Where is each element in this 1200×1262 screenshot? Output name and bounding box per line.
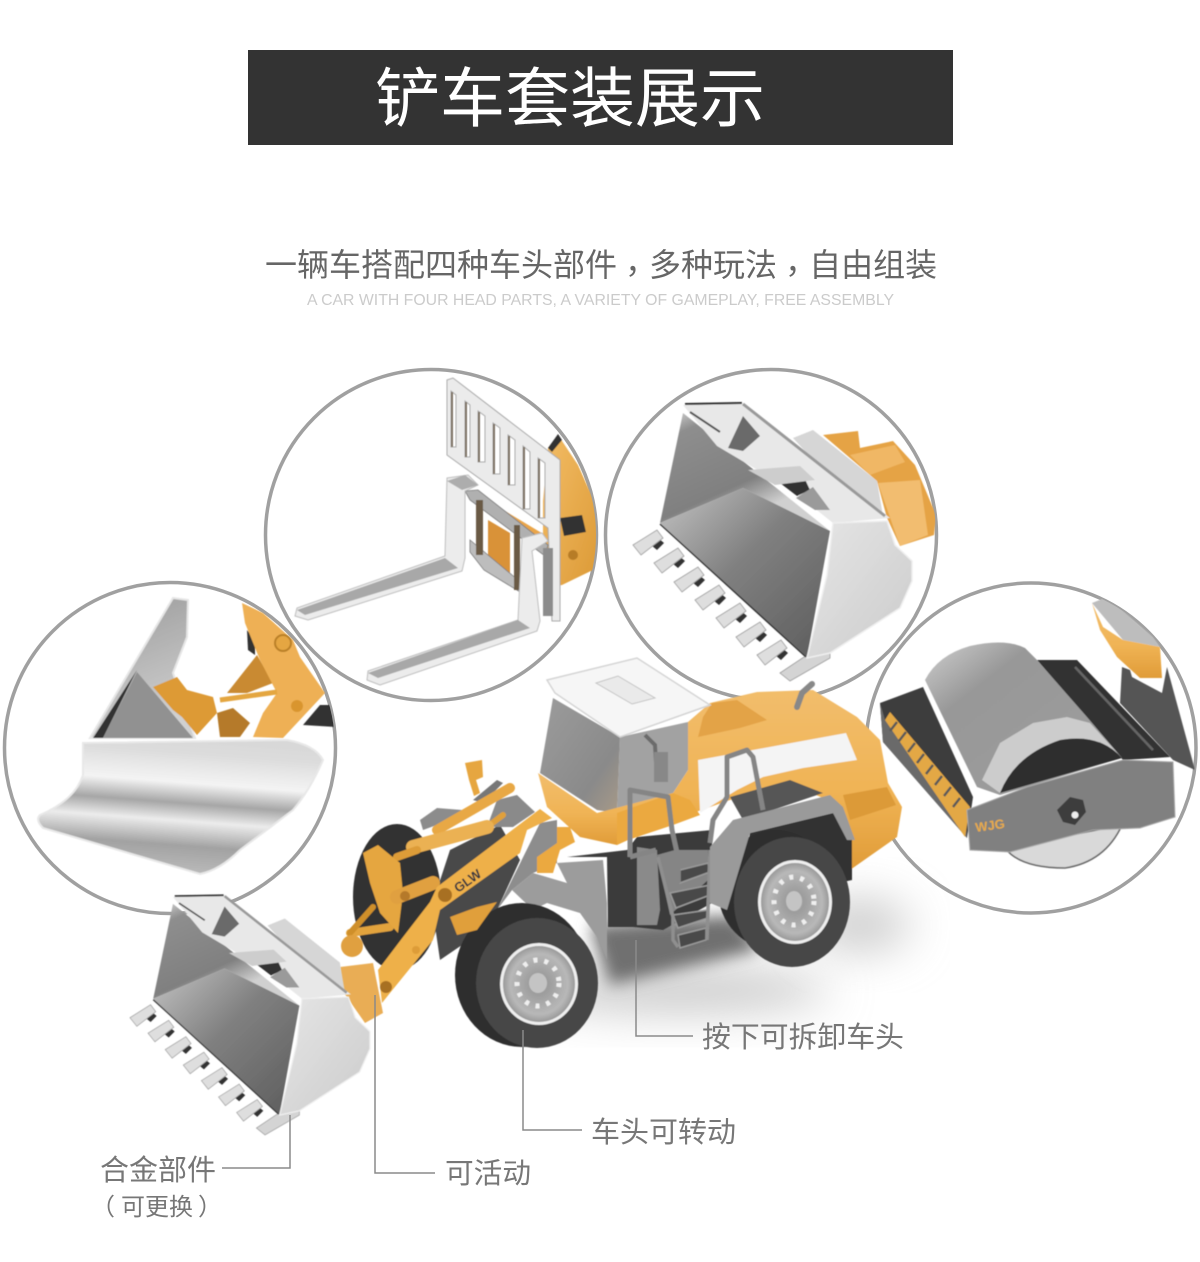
lower orange side	[617, 793, 700, 845]
subtitle chinese: 一辆车搭配四种车头部件	[265, 247, 617, 283]
plate bolt	[1057, 797, 1086, 825]
rear tire	[718, 830, 850, 967]
rear left tire	[353, 824, 441, 970]
label: alloy part: 合金部件	[100, 1154, 216, 1187]
leader lines	[222, 940, 693, 1173]
plate brand: WJG	[974, 816, 1006, 835]
panel: forklift attachment circle	[266, 370, 597, 700]
rocker	[363, 845, 403, 933]
subtitle english: A CAR WITH FOUR HEAD PARTS, A VARIETY OF GAMEPLAY, FREE ASSEMBLY	[307, 292, 894, 309]
fork left	[295, 475, 478, 620]
truck illustration	[340, 658, 902, 1048]
wheel well	[738, 813, 852, 905]
orange arm behind forklift	[543, 435, 597, 588]
title bar	[248, 50, 953, 145]
rear bumper shade	[843, 787, 896, 820]
cab orange band	[538, 773, 673, 845]
blade	[38, 740, 323, 874]
arm details	[400, 888, 497, 954]
cylinders	[350, 788, 510, 933]
hood vents	[698, 700, 767, 737]
side fin	[90, 598, 195, 738]
chassis	[567, 830, 712, 930]
label: head rotates: 车头可转动	[591, 1116, 736, 1149]
cab roof	[547, 658, 710, 737]
orange linkage	[227, 655, 273, 693]
front plate	[967, 760, 1175, 852]
main bucket	[130, 895, 370, 1135]
title text: 铲车套装展示	[375, 62, 765, 135]
rear fender	[710, 795, 855, 910]
subtitle chinese: 多种玩法	[649, 247, 777, 283]
rear left fender	[420, 808, 462, 830]
subtitle chinese: 自由组装	[809, 247, 937, 283]
body white panel	[698, 733, 857, 813]
label: replaceable: （可更换）	[91, 1194, 222, 1221]
exhaust	[797, 684, 812, 707]
stairs	[658, 850, 710, 948]
right rail and mount	[1120, 667, 1195, 770]
gray strut	[497, 820, 557, 910]
mirror	[645, 735, 668, 782]
step deck	[730, 780, 823, 820]
middle panel	[637, 847, 660, 925]
subtitle chinese: ，	[785, 244, 817, 280]
body	[673, 690, 902, 870]
roller body	[925, 642, 1122, 795]
link	[397, 883, 433, 897]
arm brand: GLW	[451, 866, 485, 895]
cab side	[617, 722, 688, 813]
panel: plow attachment circle	[4, 582, 336, 914]
gray block	[473, 780, 535, 827]
subtitle chinese: ，	[625, 244, 657, 280]
cab glass	[540, 698, 620, 813]
tires behind plow	[303, 705, 336, 727]
carriage orange	[506, 512, 542, 535]
ground shadow	[530, 899, 910, 1012]
roller cap band	[982, 717, 1122, 793]
dark body behind arm	[432, 825, 520, 960]
panel: bucket attachment circle	[606, 370, 936, 700]
panel: roller attachment circle	[866, 583, 1196, 913]
bottom wheel	[1005, 825, 1122, 868]
top pin	[465, 760, 483, 796]
fin triangle	[103, 672, 193, 738]
label: movable: 可活动	[445, 1158, 531, 1190]
tray	[880, 687, 973, 838]
front tire	[455, 903, 598, 1048]
arm bracket	[340, 935, 392, 1023]
handrails	[630, 750, 763, 883]
roller end face	[1000, 738, 1122, 793]
orange arm behind bucket	[823, 431, 936, 546]
backrest frame	[447, 378, 560, 621]
fork right	[367, 533, 548, 685]
tray yellow teeth	[885, 712, 970, 837]
carriage rails	[465, 490, 548, 556]
label: press to detach: 按下可拆卸车头	[702, 1021, 904, 1054]
loader arm	[378, 809, 552, 1003]
front fender	[512, 860, 607, 960]
orange side mount	[537, 827, 575, 873]
